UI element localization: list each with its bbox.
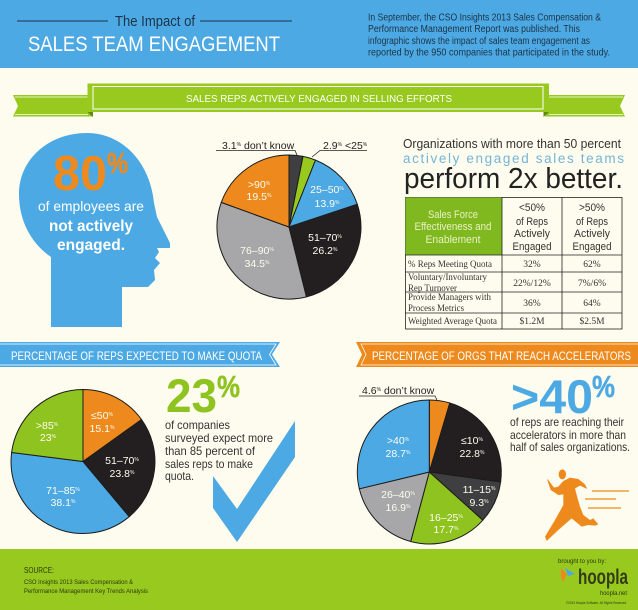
table header cells: Engaged <box>572 241 612 253</box>
pie leader labels <box>216 140 368 157</box>
text: 23% caption: surveyed expect more <box>165 431 273 445</box>
pie slice labels: 28.7 <box>386 448 406 460</box>
pie slice labels: 38.1 <box>51 497 71 509</box>
pie slice labels: % <box>335 200 340 206</box>
head caption <box>38 198 144 254</box>
text: 23% caption: sales reps to make <box>165 457 253 471</box>
pie slice labels: % <box>71 499 76 505</box>
pie slice labels: 11–15 <box>463 484 491 496</box>
table header cells: >50% <box>579 202 605 214</box>
table rows: % Reps Meeting Quota <box>408 260 493 270</box>
icon: check mark <box>213 421 295 542</box>
table rows: 22%/12% <box>513 279 551 289</box>
pie leader labels: % <box>363 142 368 148</box>
pie slice labels: 13.9 <box>315 198 335 210</box>
table rows: 7%/6% <box>578 279 606 289</box>
table rows: 32% <box>523 260 541 270</box>
source note <box>24 565 149 595</box>
pie leader labels: 3.1 <box>222 140 237 152</box>
text: 23% caption: of companies <box>165 418 230 432</box>
pie slice labels: % <box>54 422 59 428</box>
green ribbon heading <box>13 84 625 117</box>
pie slice labels: % <box>130 470 135 476</box>
pie slice labels: 25–50 <box>310 184 339 196</box>
table rows <box>408 260 606 327</box>
green ribbon heading: SALES REPS ACTIVELY ENGAGED IN SELLING EFFORTS <box>186 93 452 105</box>
pie slice labels: % <box>266 181 271 187</box>
pie slice labels: >85 <box>36 420 54 432</box>
hoopla logo: hoopla.net <box>600 590 627 597</box>
pie slice labels: 26–40 <box>381 489 410 501</box>
pie slice labels: % <box>333 247 338 253</box>
table header cells: Sales Force <box>428 209 478 221</box>
statistic: >40%: % <box>592 369 615 404</box>
text: 23% caption: than 85 percent of <box>165 444 256 458</box>
icon: running figure <box>545 469 598 541</box>
table rows: Rep Turnover <box>408 284 458 294</box>
text: >40% caption <box>510 415 630 454</box>
pie leader label: 4.6 <box>362 385 377 397</box>
pie slice labels: % <box>454 526 459 532</box>
pie leader labels: don’t know <box>241 140 295 152</box>
pie slice labels: ≤50 <box>91 410 108 422</box>
pie slice labels: % <box>491 486 496 492</box>
pie slice labels: 16.9 <box>386 502 406 514</box>
statistic: 23%: 23 <box>166 369 217 422</box>
table rows: 36% <box>523 299 541 309</box>
pie slice labels: 16–25 <box>429 512 458 524</box>
table header cells <box>414 202 612 253</box>
blue ribbon heading: PERCENTAGE OF REPS EXPECTED TO MAKE QUOTA <box>11 351 262 363</box>
pie slice labels: ≤10 <box>461 435 478 447</box>
hoopla logo: ©2013 Hoopla Software. All Rights Reserved. <box>566 601 627 605</box>
pie slice labels <box>36 410 139 509</box>
pie slice labels: 51–70 <box>105 455 134 467</box>
source note: SOURCE: <box>24 565 54 575</box>
head caption: engaged. <box>57 237 125 254</box>
statistic: >40%: >40 <box>511 370 593 423</box>
title <box>17 13 292 56</box>
text: 23% caption <box>165 418 273 483</box>
footer band <box>0 549 638 610</box>
pie chart: reps expected to make quota <box>11 390 155 533</box>
pie slice labels: % <box>75 487 80 493</box>
pie slice labels: % <box>267 193 272 199</box>
head caption: not actively <box>49 218 133 235</box>
heading: perform 2x better: perform 2x better. <box>404 163 623 195</box>
pie slice labels: % <box>265 260 270 266</box>
table header cells: of Reps <box>576 216 608 228</box>
pie leader labels: <25 <box>342 140 363 152</box>
pie leader labels: % <box>338 142 343 148</box>
blue ribbon heading <box>0 342 280 367</box>
pie slice labels: % <box>478 437 484 443</box>
pie leader label: % <box>377 387 382 393</box>
table rows: Weighted Average Quota <box>408 317 498 327</box>
pie slice labels: % <box>406 450 411 456</box>
pie slice labels: >40 <box>387 435 405 447</box>
pie chart: orgs reaching accelerators <box>357 385 501 544</box>
intro text: reported by the 950 companies that participated in the study. <box>368 48 610 58</box>
pie chart: reps actively engaged <box>216 140 368 299</box>
table header cells: Actively <box>514 228 550 240</box>
table header cells: Enablement <box>426 234 480 246</box>
pie slice labels: 23 <box>40 432 52 444</box>
pie slice labels: % <box>110 425 115 431</box>
pie slice labels: % <box>406 504 411 510</box>
table header cells: <50% <box>519 202 545 214</box>
pie slice labels: % <box>269 247 274 253</box>
table rows: $2.5M <box>579 316 605 327</box>
pie slice labels: 34.5 <box>245 258 265 270</box>
text: 23% caption: quota. <box>165 469 194 483</box>
header band <box>0 0 638 68</box>
source note: CSO Insights 2013 Sales Compensation & <box>24 579 134 586</box>
pie slice labels: 15.1 <box>90 423 110 435</box>
icon: head with 80 percent <box>19 133 170 327</box>
table header cells: Effectiveness and <box>414 221 492 233</box>
statistic: 23%: % <box>217 369 240 404</box>
hoopla logo: brought to you by: <box>558 558 606 565</box>
table: sales force effectiveness <box>405 197 622 329</box>
pie slice labels: >90 <box>248 179 266 191</box>
table rows: 62% <box>583 260 601 270</box>
pie slice labels: % <box>52 434 57 440</box>
pie slice labels <box>240 179 344 270</box>
table header cells: Actively <box>574 228 610 240</box>
title: SALES TEAM ENGAGEMENT <box>28 33 280 56</box>
heading: perform 2x better <box>403 136 624 195</box>
intro text: In September, the CSO Insights 2013 Sales Compensation & <box>368 12 601 24</box>
heading: perform 2x better: actively engaged sales teams <box>403 151 624 166</box>
table rows: $1.2M <box>519 316 545 327</box>
pie slice labels: 71–85 <box>46 485 75 497</box>
title: The Impact of <box>115 13 196 30</box>
pie slice labels: 19.5 <box>247 191 267 203</box>
table header cells: Engaged <box>512 241 552 253</box>
intro text <box>368 12 610 58</box>
pie leader labels: 2.9 <box>323 140 338 152</box>
pie slice labels: % <box>458 514 463 520</box>
pie slice labels: 17.7 <box>434 524 454 536</box>
table rows: 64% <box>583 299 601 309</box>
pie slice labels: 51–70 <box>308 232 337 244</box>
pie slice labels: % <box>339 186 344 192</box>
pie leader label: don’t know <box>381 385 435 397</box>
pie slice labels: 23.8 <box>110 468 130 480</box>
table rows: Voluntary/Involuntary <box>408 273 487 283</box>
pie slice labels: % <box>134 457 139 463</box>
table header cells: of Reps <box>516 216 548 228</box>
pie slice labels: % <box>108 412 114 418</box>
head caption: of employees are <box>38 198 144 214</box>
pie slice labels: 76–90 <box>240 245 269 257</box>
pie leader labels: % <box>237 142 242 148</box>
pie slice labels: 9.3 <box>469 497 484 509</box>
pie slice labels: % <box>405 437 410 443</box>
pie leader label <box>359 385 437 400</box>
hoopla logo <box>558 558 628 605</box>
pie slice labels: % <box>410 491 415 497</box>
statistic: 80%: 80 <box>53 147 107 201</box>
pie slice labels: % <box>337 234 342 240</box>
table rows: Provide Managers with <box>408 293 491 303</box>
pie slice labels: % <box>484 499 489 505</box>
pie slice labels: 22.8 <box>460 448 480 460</box>
orange ribbon heading <box>356 342 638 367</box>
pie slice labels: % <box>480 450 485 456</box>
pie slice labels <box>381 435 496 536</box>
heading: perform 2x better: Organizations with more than 50 percent <box>403 136 621 151</box>
source note: Performance Management Key Trends Analysis <box>24 588 149 595</box>
table rows: Process Metrics <box>408 304 464 314</box>
intro text: Performance Management Report was published. This <box>368 24 580 35</box>
intro text: infographic shows the impact of sales team engagement as <box>368 36 590 47</box>
pie slice labels: 26.2 <box>313 245 333 257</box>
statistic: 80%: % <box>107 148 128 180</box>
icon: speed lines <box>585 491 629 508</box>
